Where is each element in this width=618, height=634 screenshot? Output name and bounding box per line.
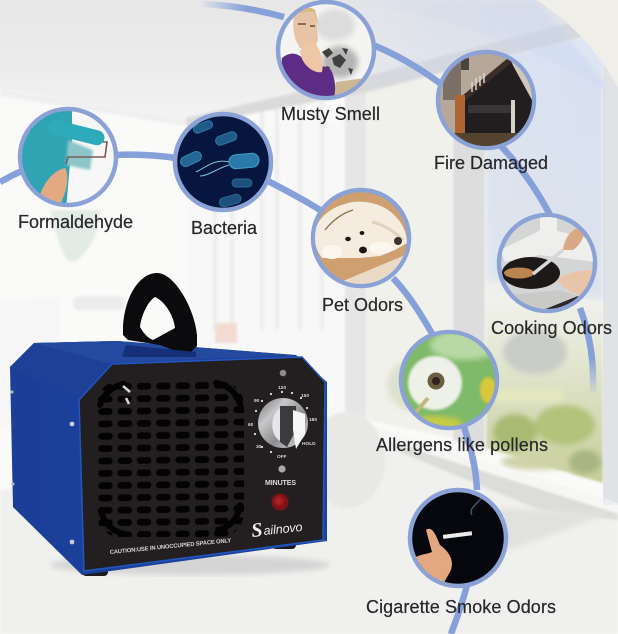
ozone generator device: ailnovo <box>263 520 303 538</box>
minutes label: MINUTES <box>265 480 296 487</box>
dial: 120 <box>278 385 286 391</box>
circle: cigarette <box>410 490 506 586</box>
circle: formaldehyde <box>20 108 116 210</box>
feet <box>82 568 108 576</box>
circle: cooking odors <box>499 215 597 312</box>
caution text: CAUTION:USE IN UNOCCUPIED SPACE ONLY <box>110 538 232 556</box>
label: Formaldehyde: Formaldehyde <box>18 212 133 232</box>
label: Musty Smell: Musty Smell <box>281 104 380 124</box>
circle: allergens <box>401 330 500 432</box>
brand: S <box>250 519 264 542</box>
front panel <box>79 357 325 571</box>
circle: musty smell <box>278 2 374 100</box>
dial: 60 <box>248 422 254 428</box>
dial: HOLD <box>302 441 316 447</box>
screws on side <box>70 422 74 426</box>
label: Cigarette Smoke Odors: Cigarette Smoke Odors <box>366 597 556 617</box>
dial <box>248 385 317 460</box>
ozone generator device <box>10 273 330 576</box>
label: Bacteria: Bacteria <box>191 218 258 238</box>
label: Fire Damaged: Fire Damaged <box>434 153 548 173</box>
circle: fire damaged <box>438 52 534 149</box>
dial: 30 <box>256 444 262 450</box>
label: Pet Odors: Pet Odors <box>322 295 403 315</box>
handle <box>123 273 197 352</box>
bacteria flagella <box>196 161 229 176</box>
circle: pet odors <box>313 190 409 290</box>
dial: OFF <box>277 454 287 460</box>
label: Cooking Odors: Cooking Odors <box>491 318 612 338</box>
dial: 150 <box>301 393 309 399</box>
red lamp <box>272 494 288 510</box>
circle: bacteria <box>175 114 271 210</box>
dial: 180 <box>309 417 317 423</box>
label: Allergens like pollens: Allergens like pollens <box>376 435 548 455</box>
blue body <box>10 341 327 575</box>
garden outside window <box>387 330 601 474</box>
grille <box>96 381 244 537</box>
dial: 90 <box>254 398 260 404</box>
